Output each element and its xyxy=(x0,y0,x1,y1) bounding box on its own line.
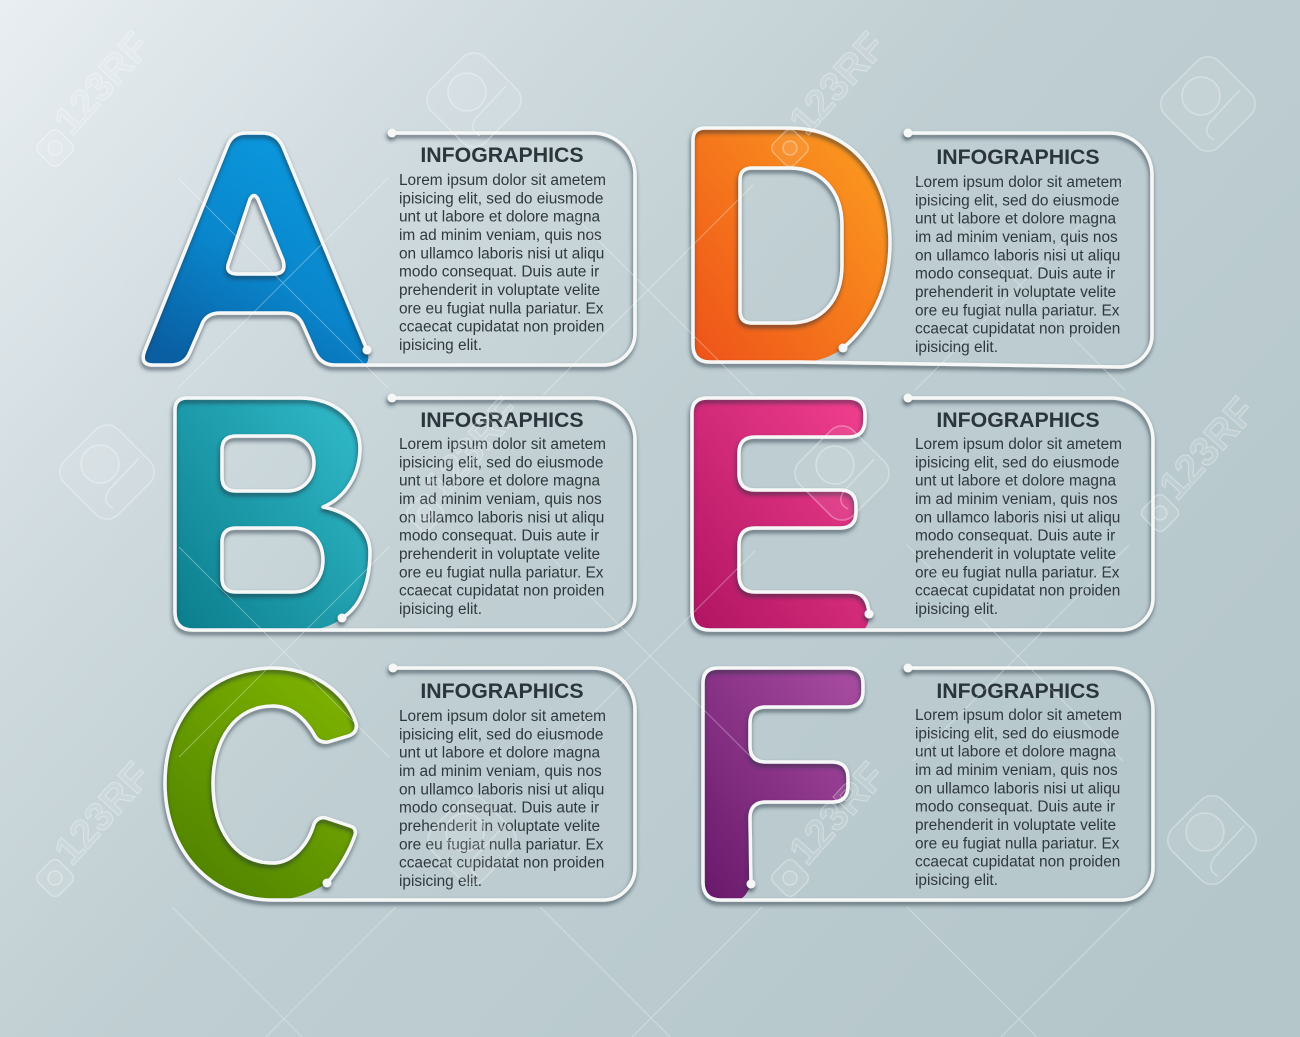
text block A: im ad minim veniam, quis nos xyxy=(399,227,602,244)
text block A: ore eu fugiat nulla pariatur. Ex xyxy=(399,300,604,317)
letter F fill xyxy=(703,668,863,900)
panel: C xyxy=(165,664,635,900)
text block D: modo consequat. Duis aute ir xyxy=(915,266,1115,283)
text block A: unt ut labore et dolore magna xyxy=(399,209,601,226)
panel: E xyxy=(692,394,1153,630)
text block C: Lorem ipsum dolor sit ametem xyxy=(399,708,606,725)
text block B: ipisicing elit. xyxy=(399,601,482,618)
letter D outline and frame xyxy=(693,128,1152,367)
text block F: ipisicing elit, sed do eiusmode xyxy=(915,725,1119,742)
text block B: ipisicing elit, sed do eiusmode xyxy=(399,454,603,471)
letter A outline and frame xyxy=(143,128,635,365)
text block B: unt ut labore et dolore magna xyxy=(399,473,601,490)
text block E: ipisicing elit, sed do eiusmode xyxy=(915,454,1119,471)
text block C xyxy=(399,679,606,890)
text block F: im ad minim veniam, quis nos xyxy=(915,762,1118,779)
text block A xyxy=(399,143,606,354)
text block F: ore eu fugiat nulla pariatur. Ex xyxy=(915,835,1120,852)
letter D fill xyxy=(693,128,890,362)
text block A: modo consequat. Duis aute ir xyxy=(399,264,599,281)
text block D xyxy=(915,145,1122,356)
text block F: Lorem ipsum dolor sit ametem xyxy=(915,707,1122,724)
watermark: logo 3: 123RF xyxy=(416,389,529,508)
watermark: logo 6: 123RF xyxy=(781,754,894,873)
letter C fill xyxy=(165,668,356,900)
text block E: Lorem ipsum dolor sit ametem xyxy=(915,436,1122,453)
text block B: on ullamco laboris nisi ut aliqu xyxy=(399,509,604,526)
text block C: on ullamco laboris nisi ut aliqu xyxy=(399,781,604,798)
text block F: on ullamco laboris nisi ut aliqu xyxy=(915,780,1120,797)
text block C: im ad minim veniam, quis nos xyxy=(399,763,602,780)
watermark: logo 4: 123RF xyxy=(1151,389,1264,508)
text block E: on ullamco laboris nisi ut aliqu xyxy=(915,509,1120,526)
text block B: prehenderit in voluptate velite xyxy=(399,546,600,563)
text block C: unt ut labore et dolore magna xyxy=(399,745,601,762)
text block F: unt ut labore et dolore magna xyxy=(915,744,1117,761)
letter B outline and frame xyxy=(175,394,635,630)
text block D: unt ut labore et dolore magna xyxy=(915,211,1117,228)
text block B: modo consequat. Duis aute ir xyxy=(399,528,599,545)
text block A: ccaecat cupidatat non proiden xyxy=(399,319,604,336)
text block A: ipisicing elit, sed do eiusmode xyxy=(399,190,603,207)
text block C: ccaecat cupidatat non proiden xyxy=(399,855,604,872)
panel: B xyxy=(175,394,635,630)
text block A: Lorem ipsum dolor sit ametem xyxy=(399,172,606,189)
text block E: prehenderit in voluptate velite xyxy=(915,546,1116,563)
diagonal overlay lines xyxy=(172,178,1131,1037)
text block C: ore eu fugiat nulla pariatur. Ex xyxy=(399,836,604,853)
watermark: logo 2: 123RF xyxy=(781,24,894,143)
text block C: prehenderit in voluptate velite xyxy=(399,818,600,835)
text block F: ipisicing elit. xyxy=(915,872,998,889)
text block C: ipisicing elit, sed do eiusmode xyxy=(399,726,603,743)
text block D: ccaecat cupidatat non proiden xyxy=(915,321,1120,338)
text block E: ipisicing elit. xyxy=(915,601,998,618)
text block E: modo consequat. Duis aute ir xyxy=(915,528,1115,545)
watermark: blob middle center xyxy=(788,419,896,527)
text block D: prehenderit in voluptate velite xyxy=(915,284,1116,301)
watermark: logo 1: 123RF xyxy=(46,24,159,143)
letter C outline and frame xyxy=(165,664,635,900)
text block B xyxy=(399,408,606,618)
letter E outline and frame xyxy=(692,394,1153,630)
letter B fill xyxy=(175,398,370,630)
watermark: blob bottom middle xyxy=(421,789,523,891)
panel: A xyxy=(143,128,635,365)
text block B: INFOGRAPHICS xyxy=(420,408,584,432)
letter A fill xyxy=(143,133,368,365)
text block F: modo consequat. Duis aute ir xyxy=(915,799,1115,816)
text block C: INFOGRAPHICS xyxy=(420,679,584,703)
text block E: ore eu fugiat nulla pariatur. Ex xyxy=(915,564,1120,581)
text block E: im ad minim veniam, quis nos xyxy=(915,491,1118,508)
text block A: ipisicing elit. xyxy=(399,337,482,354)
text block D: Lorem ipsum dolor sit ametem xyxy=(915,174,1122,191)
text block E xyxy=(915,408,1122,618)
text block F: INFOGRAPHICS xyxy=(936,679,1100,703)
watermark: blob top middle xyxy=(420,46,528,154)
text block B: Lorem ipsum dolor sit ametem xyxy=(399,436,606,453)
watermark: blob middle left xyxy=(53,418,161,526)
text block E: ccaecat cupidatat non proiden xyxy=(915,583,1120,600)
text block D: ipisicing elit, sed do eiusmode xyxy=(915,192,1119,209)
text block D: ore eu fugiat nulla pariatur. Ex xyxy=(915,302,1120,319)
text block B: im ad minim veniam, quis nos xyxy=(399,491,602,508)
watermarks xyxy=(34,24,1264,899)
panel: F xyxy=(703,664,1153,900)
watermark: blob top right xyxy=(1154,50,1262,158)
text block B: ore eu fugiat nulla pariatur. Ex xyxy=(399,564,604,581)
panel: D xyxy=(693,128,1152,367)
text block D: ipisicing elit. xyxy=(915,339,998,356)
text block D: im ad minim veniam, quis nos xyxy=(915,229,1118,246)
text block F xyxy=(915,679,1122,889)
text block C: ipisicing elit. xyxy=(399,873,482,890)
watermark: logo 5: 123RF xyxy=(46,754,159,873)
text block E: INFOGRAPHICS xyxy=(936,408,1100,432)
text block D: INFOGRAPHICS xyxy=(936,145,1100,169)
text block A: on ullamco laboris nisi ut aliqu xyxy=(399,245,604,262)
text block E: unt ut labore et dolore magna xyxy=(915,473,1117,490)
letter F outline and frame xyxy=(703,664,1153,900)
text block F: prehenderit in voluptate velite xyxy=(915,817,1116,834)
letter E fill xyxy=(692,398,869,630)
text block D: on ullamco laboris nisi ut aliqu xyxy=(915,247,1120,264)
text block C: modo consequat. Duis aute ir xyxy=(399,800,599,817)
watermark: blob bottom right xyxy=(1161,789,1263,891)
text block B: ccaecat cupidatat non proiden xyxy=(399,583,604,600)
text block F: ccaecat cupidatat non proiden xyxy=(915,854,1120,871)
text block A: INFOGRAPHICS xyxy=(420,143,584,167)
text block A: prehenderit in voluptate velite xyxy=(399,282,600,299)
